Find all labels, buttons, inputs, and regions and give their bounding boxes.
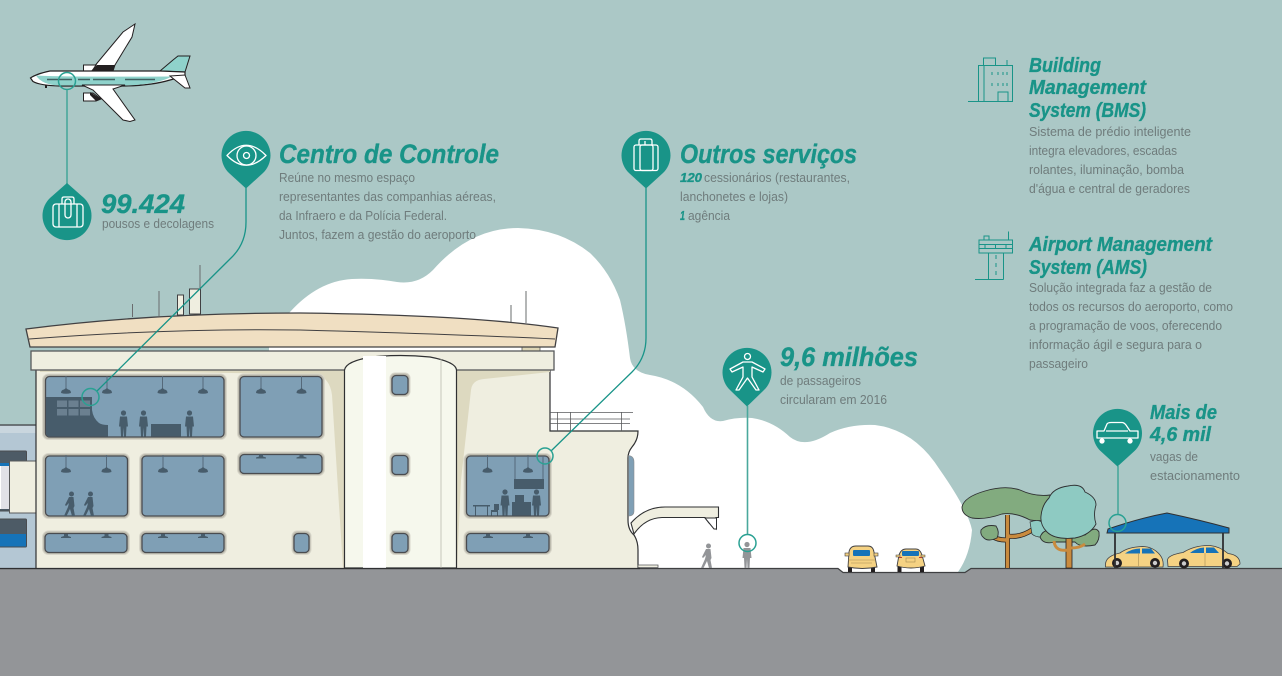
heading: 9,6 milhões: de passageiros — [780, 373, 861, 388]
stat: 99.424 — [101, 189, 214, 231]
heading: Airport Management System: passageiro — [1029, 356, 1088, 371]
connector: parking — [1109, 466, 1126, 532]
pin: eye — [222, 131, 270, 188]
connector: passengers — [739, 406, 756, 552]
balcony railing — [550, 412, 633, 431]
heading: Outros serviços: 1 — [680, 208, 685, 223]
pin: car — [1093, 409, 1142, 466]
heading: Mais de 4,6 mil — [1149, 402, 1240, 483]
icon: building — [968, 58, 1013, 102]
heading: Building Management System: integra elevadores, escadas — [1029, 143, 1177, 158]
roof band — [31, 351, 554, 370]
window: slim bottom left — [42, 531, 130, 554]
window: small — [292, 531, 311, 554]
wall shadows — [40, 370, 344, 568]
icon: suitcase — [53, 197, 83, 227]
icon: eye — [227, 145, 266, 165]
heading: Airport Management System: Airport Management — [1028, 234, 1213, 256]
tree right — [1030, 485, 1099, 568]
heading: Centro de Controle — [279, 139, 499, 242]
window: walkers — [42, 454, 130, 518]
heading: Building Management System: d'água e central de geradores — [1029, 181, 1190, 196]
heading: Mais de 4,6 mil: estacionamento — [1150, 468, 1240, 483]
main building — [0, 313, 718, 568]
roof — [26, 313, 558, 347]
building left annex — [0, 425, 36, 568]
heading: Outros serviços: agência — [688, 208, 731, 223]
heading: Airport Management System: a programação de voos, oferecendo — [1029, 318, 1222, 333]
pin: luggage — [43, 183, 92, 240]
connector: shops — [537, 188, 646, 464]
heading: Mais de 4,6 mil: 4,6 mil — [1149, 424, 1211, 446]
car right — [1168, 545, 1240, 568]
stat: 99.424: 99.424 — [101, 189, 185, 219]
heading: Airport Management System — [1028, 234, 1233, 371]
connector: plane to pouch pin — [58, 72, 76, 184]
heading: Building Management System: rolantes, iluminação, bomba — [1029, 162, 1185, 177]
white cloud — [269, 228, 972, 572]
icon: control tower — [975, 232, 1012, 280]
window: slim right bottom — [464, 531, 552, 554]
side window strip — [628, 456, 634, 516]
heading: Mais de 4,6 mil: Mais de — [1150, 402, 1217, 424]
icon: car — [1097, 422, 1138, 443]
icon: person — [730, 354, 765, 390]
heading: Building Management System: Management — [1029, 77, 1147, 99]
heading: Outros serviços: Outros serviços — [680, 139, 857, 169]
ground — [0, 568, 1282, 676]
heading: 9,6 milhões: 9,6 milhões — [780, 342, 918, 372]
heading: Airport Management System: System (AMS) — [1029, 257, 1147, 279]
heading: Building Management System: System (BMS) — [1029, 100, 1146, 122]
heading: Outros serviços: 120 — [680, 170, 703, 185]
tower windows — [390, 373, 410, 554]
trees — [962, 485, 1099, 568]
window: slim right — [238, 452, 324, 476]
walls — [36, 370, 638, 568]
tree left — [962, 488, 1050, 568]
heading: Centro de Controle: da Infraero e da Polícia Federal. — [279, 208, 447, 223]
heading: Centro de Controle: Reúne no mesmo espaço — [279, 170, 415, 185]
heading: Building Management System: Building — [1029, 55, 1101, 77]
heading: 9,6 milhões — [780, 342, 918, 407]
gap behind roof — [31, 346, 269, 351]
heading: Outros serviços: lanchonetes e lojas) — [680, 189, 788, 204]
window: middle — [140, 454, 226, 518]
taxi 1 — [845, 546, 878, 572]
tower — [344, 356, 456, 568]
heading: Outros serviços — [680, 139, 857, 223]
pin: person — [722, 348, 772, 406]
pedestrians — [701, 542, 752, 568]
car left — [1106, 546, 1163, 568]
heading: Centro de Controle: representantes das companhias aéreas, — [279, 189, 496, 204]
heading: Centro de Controle: Centro de Controle — [279, 139, 499, 169]
parked cars under canopy — [1106, 513, 1240, 568]
roof supports — [46, 346, 540, 352]
heading: Centro de Controle: Juntos, fazem a gestão do aeroporto — [279, 227, 476, 242]
stat: 99.424: pousos e decolagens — [102, 216, 214, 231]
heading: 9,6 milhões: circularam em 2016 — [780, 392, 887, 407]
heading: Mais de 4,6 mil: vagas de — [1150, 449, 1198, 464]
window: slim bottom middle — [140, 531, 226, 554]
pin: shopping bag — [622, 131, 670, 188]
covered parking canopy — [1107, 513, 1229, 568]
heading: Building Management System: Sistema de prédio inteligente — [1029, 124, 1191, 139]
airplane — [30, 24, 190, 122]
connector: control room — [82, 188, 246, 406]
rooftop antennas — [132, 265, 526, 323]
heading: Airport Management System: informação ágil e segura para o — [1029, 337, 1202, 352]
canopy — [631, 507, 718, 534]
heading: Outros serviços: cessionários (restaurantes, — [704, 170, 850, 185]
icon: bag — [634, 139, 658, 170]
window: control room — [42, 374, 226, 440]
window: upper right — [238, 374, 324, 440]
heading: Airport Management System: todos os recursos do aeroporto, como — [1029, 299, 1233, 314]
building base line — [0, 568, 640, 570]
heading: Building Management System — [1029, 55, 1191, 196]
window: shops — [464, 454, 552, 518]
heading: Airport Management System: Solução integrada faz a gestão de — [1029, 280, 1212, 295]
taxis rear view — [845, 546, 925, 572]
taxi 2 — [896, 549, 925, 572]
